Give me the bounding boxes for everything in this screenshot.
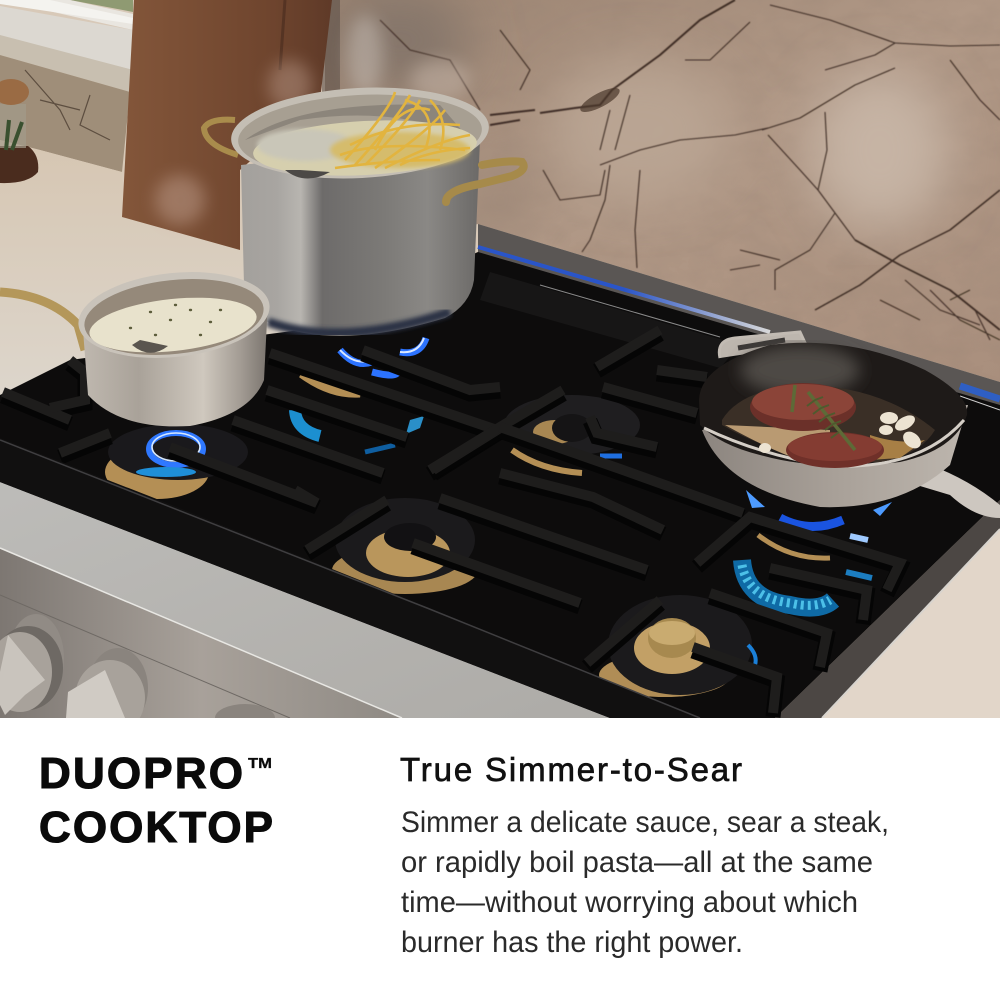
counter left — [0, 140, 480, 400]
window and sill — [0, 0, 133, 172]
title: COOKTOP — [39, 803, 273, 852]
steak front — [786, 432, 884, 468]
skillet — [699, 332, 1000, 518]
body text: or rapidly boil pasta—all at the same — [401, 846, 873, 879]
icon: plant jar — [0, 79, 38, 183]
title: DUOPRO — [39, 749, 243, 798]
pot handle right — [446, 161, 524, 202]
rear ledge and lights — [478, 247, 1000, 410]
burner rear centre — [300, 338, 426, 396]
body text: Simmer a delicate sauce, sear a steak, — [401, 806, 889, 839]
photo: cooktop scene — [0, 0, 1000, 736]
oil — [722, 385, 935, 462]
marble backsplash — [322, 0, 1000, 382]
back stainless strip with blue light — [478, 224, 1000, 420]
control knobs — [0, 614, 275, 736]
cooktop black base — [0, 252, 1000, 718]
subheading: True Simmer-to-Sear — [400, 751, 742, 788]
body text: time—without worrying about which — [401, 886, 858, 919]
sauce — [87, 290, 259, 360]
rosemary — [792, 385, 855, 450]
saucepan — [0, 263, 274, 426]
pot handle left — [204, 120, 238, 155]
right counter — [822, 528, 1000, 718]
burner left — [105, 424, 248, 499]
steel trim right — [775, 500, 1000, 718]
front rail — [0, 438, 700, 718]
burner centre rear — [504, 395, 640, 473]
range front panel — [0, 548, 402, 718]
title — [39, 749, 273, 852]
burner centre front — [332, 498, 478, 594]
pasta — [335, 92, 470, 168]
steam — [155, 15, 470, 225]
cutting board — [122, 0, 332, 250]
grates — [3, 330, 900, 717]
title: TM — [248, 755, 272, 772]
burner blue flames mid — [295, 410, 424, 452]
body text — [401, 806, 889, 959]
burner right blue flame — [742, 535, 872, 608]
stock pot — [204, 81, 524, 336]
burner flames under skillet — [746, 490, 892, 540]
stainless top surface — [0, 470, 620, 718]
steak rear — [750, 383, 856, 431]
body text: burner has the right power. — [401, 926, 743, 959]
garlic — [759, 412, 924, 453]
burner right front — [599, 595, 756, 697]
white caption panel — [0, 718, 1000, 1000]
